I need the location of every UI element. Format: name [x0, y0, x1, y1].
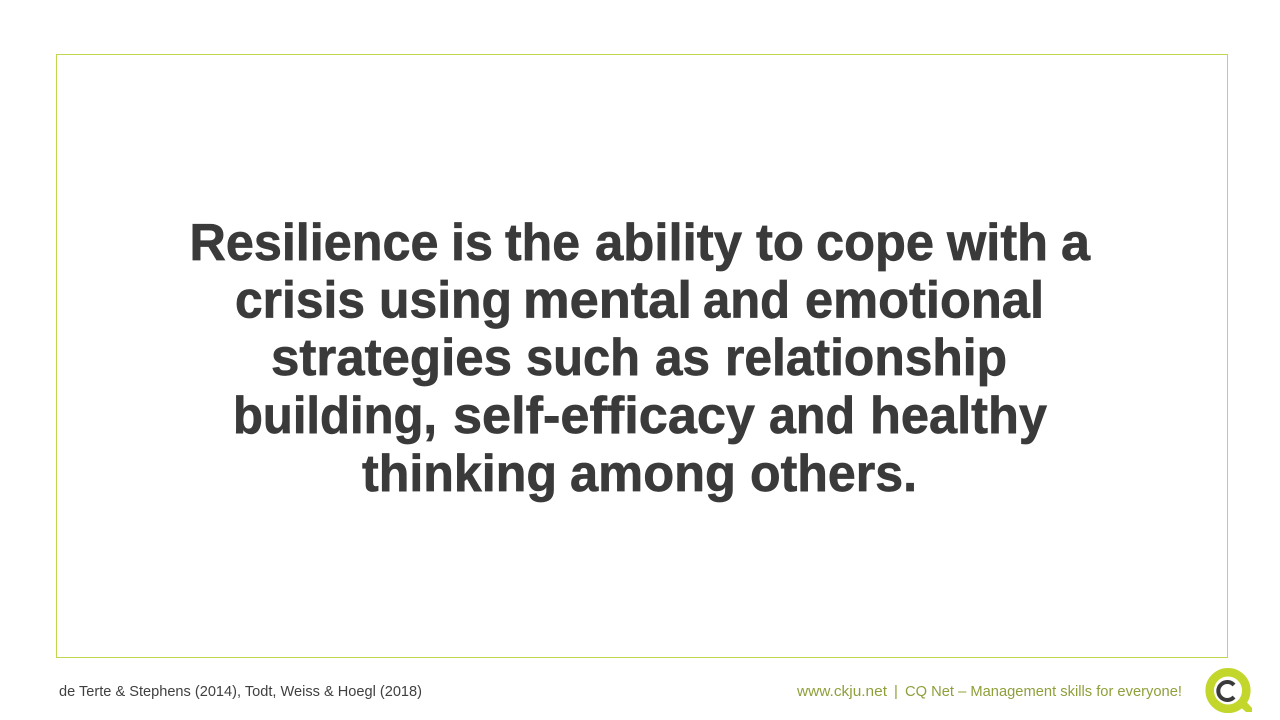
heading: resilience definition: cope [816, 214, 934, 272]
heading: resilience definition: such [526, 329, 640, 387]
heading: resilience definition: building, [233, 387, 437, 445]
icon: CQ logo [1210, 672, 1252, 712]
heading: resilience definition: using [379, 272, 512, 330]
heading: resilience definition: is [451, 214, 493, 272]
heading: resilience definition: and [703, 272, 790, 330]
heading: resilience definition: ability [595, 214, 742, 272]
heading: resilience definition: crisis [235, 272, 365, 330]
heading: resilience definition: the [505, 214, 580, 272]
heading: resilience definition: self-efficacy [453, 387, 755, 445]
heading: resilience definition: strategies [271, 329, 512, 387]
heading: resilience definition: others. [750, 445, 917, 503]
heading: resilience definition: thinking [362, 445, 557, 503]
heading: resilience definition: as [655, 329, 710, 387]
heading: resilience definition: with [946, 214, 1048, 272]
heading: resilience definition: and [769, 387, 855, 445]
heading: resilience definition: a [1061, 214, 1091, 272]
panel: framed border [56, 54, 1228, 658]
text: website and tagline: www.ckju.net [796, 683, 888, 700]
heading: resilience definition: among [570, 445, 736, 503]
heading: resilience definition: healthy [870, 387, 1047, 445]
heading: resilience definition: mental [523, 272, 692, 330]
heading: resilience definition: to [756, 214, 804, 272]
heading: resilience definition: Resilience [190, 214, 438, 272]
heading: resilience definition: emotional [805, 272, 1044, 330]
heading: resilience definition [190, 214, 1091, 503]
text: source citation: de Terte & Stephens (2014), Todt, Weiss & Hoegl (2018) [59, 683, 422, 700]
heading: resilience definition: relationship [725, 329, 1007, 387]
text: website and tagline: CQ Net – Management skills for everyone! [905, 683, 1182, 700]
text: website and tagline: | [894, 683, 898, 700]
